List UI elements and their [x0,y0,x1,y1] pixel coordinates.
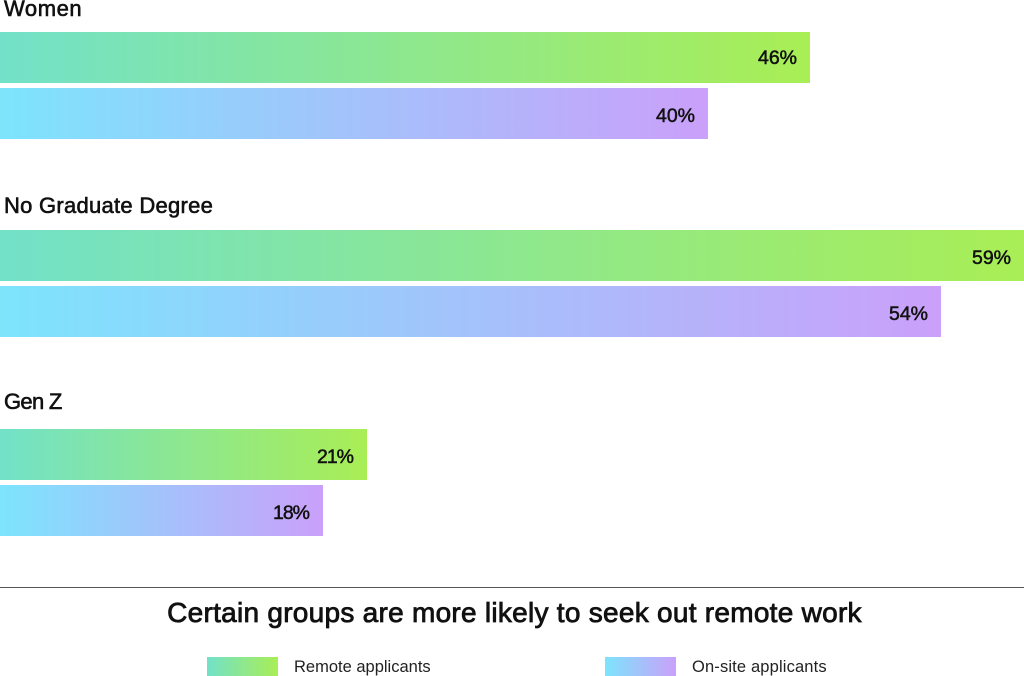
bar: No Graduate Degree on-site 54% [0,286,941,337]
heading: Gen Z: Gen Z [4,389,62,414]
bar: Gen Z remote 21%: 21% [317,446,353,468]
legend swatch: on-site [605,657,676,676]
legend swatch: remote [207,657,278,676]
heading: No Graduate Degree: No Graduate Degree [4,193,213,218]
bar: Women on-site 40%: 40% [656,105,695,127]
bar: Women on-site 40% [0,88,708,139]
bar: Women remote 46%: 46% [758,47,797,69]
title: Certain groups are more likely to seek out remote work [167,597,862,628]
bar: No Graduate Degree remote 59% [0,230,1024,281]
bar: Gen Z on-site 18%: 18% [273,502,309,524]
bar: No Graduate Degree on-site 54%: 54% [889,303,928,325]
bar: No Graduate Degree remote 59%: 59% [972,247,1011,269]
bar: Women remote 46% [0,32,810,83]
bar: Gen Z on-site 18% [0,485,323,536]
bar: Gen Z remote 21% [0,429,367,480]
legend label: remote: Remote applicants [294,658,431,676]
legend label: on-site: On-site applicants [692,658,827,676]
